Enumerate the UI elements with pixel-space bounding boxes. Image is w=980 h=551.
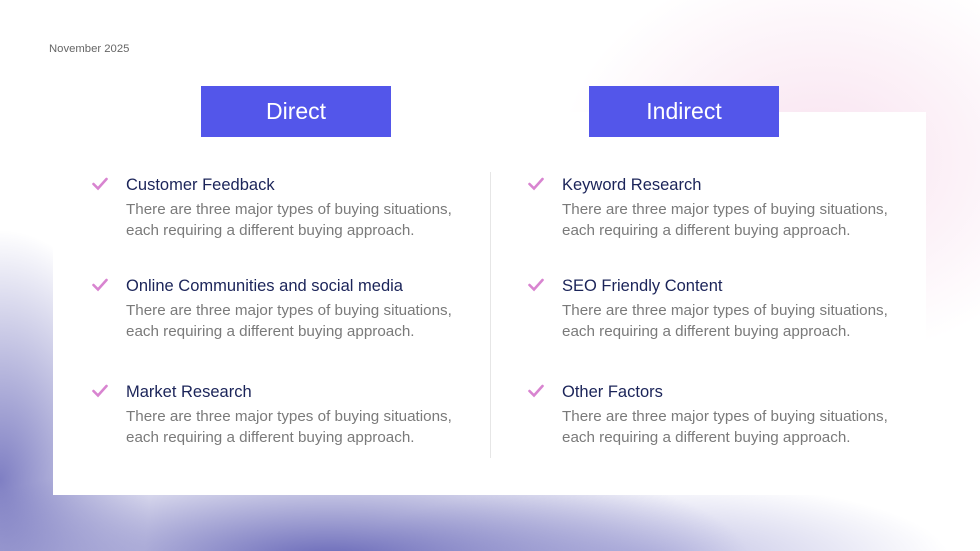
heading: Indirect <box>589 86 779 137</box>
item: Market Research <box>92 383 452 446</box>
text: There are three major types of buying situations, <box>562 302 888 319</box>
text: Market Research <box>126 383 252 401</box>
text: each requiring a different buying approach. <box>562 222 850 239</box>
item: Other Factors <box>528 383 888 446</box>
item: SEO Friendly Content <box>528 277 888 340</box>
text: Customer Feedback <box>126 176 275 194</box>
text: SEO Friendly Content <box>562 277 722 295</box>
icon: check <box>92 178 108 190</box>
icon: check <box>528 178 544 190</box>
panel: card <box>53 112 926 495</box>
heading: Indirect: Indirect <box>646 98 722 124</box>
text: each requiring a different buying approach. <box>562 429 850 446</box>
icon: check <box>528 278 544 292</box>
heading: Direct: Direct <box>266 98 326 124</box>
text: There are three major types of buying situations, <box>126 201 452 218</box>
heading: Direct <box>201 86 391 137</box>
item: Customer Feedback <box>92 176 452 239</box>
icon: check <box>528 384 544 398</box>
item: Online Communities <box>92 277 452 340</box>
text: Other Factors <box>562 383 663 401</box>
text: There are three major types of buying situations, <box>126 302 452 319</box>
text: There are three major types of buying situations, <box>562 408 888 425</box>
date: November 2025 <box>49 43 129 55</box>
text: each requiring a different buying approach. <box>126 323 414 340</box>
icon: check <box>92 384 108 398</box>
text: There are three major types of buying situations, <box>126 408 452 425</box>
icon: check <box>92 278 108 292</box>
text: each requiring a different buying approach. <box>562 323 850 340</box>
item: Keyword Research <box>528 176 888 239</box>
text: Keyword Research <box>562 176 701 194</box>
text: Online Communities and social media <box>126 277 403 295</box>
text: each requiring a different buying approach. <box>126 429 414 446</box>
text: There are three major types of buying situations, <box>562 201 888 218</box>
text: each requiring a different buying approach. <box>126 222 414 239</box>
